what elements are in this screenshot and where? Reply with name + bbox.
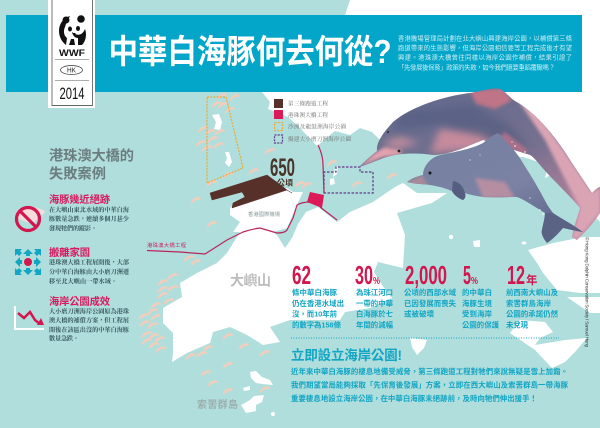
logo year: 2014 xyxy=(60,84,84,103)
heading: failure case xyxy=(49,148,134,182)
icon: dispersing arrows xyxy=(15,249,41,275)
stat: 12 years xyxy=(506,260,559,330)
line: north link xyxy=(318,145,324,193)
stat: 2000 hectares xyxy=(404,260,457,318)
logo HK badge: HK xyxy=(67,68,76,74)
intro text: 香港機場管理局計劃在北大嶼山興建海岸公園，以補償第三條 xyxy=(398,34,573,42)
body text xyxy=(291,367,569,403)
label: 650 hectares: 公頃 xyxy=(277,178,293,188)
case: moved away: 港珠澳大橋工程展開後，大部 xyxy=(49,258,129,266)
legend item: existing park: 沙洲及龍鼓洲海岸公園 xyxy=(288,122,346,130)
land: island in proposed park xyxy=(333,166,338,177)
land: north-east coast xyxy=(262,0,600,222)
brown polygon: third runway xyxy=(210,175,292,208)
land: small island xyxy=(225,152,232,167)
stat: 30 percent: 一帶的中華 xyxy=(356,299,394,308)
land: Soko islands north xyxy=(250,371,273,385)
label: Lantau: 大嶼山 xyxy=(230,272,271,288)
case: moved away: 分中華白海豚由大小磨刀洲遷 xyxy=(49,268,130,276)
stat: 2000 hectares: 或被破壞 xyxy=(404,310,435,318)
body text: 我們期望當局能夠採取「先保育後發展」方案，立即在西大嶼山及索罟群島一帶海豚 xyxy=(291,380,569,390)
stat: 62 dolphins: 的數字為158條 xyxy=(292,320,342,330)
stat: 30 percent xyxy=(355,260,394,330)
legend xyxy=(274,99,351,143)
stat: 12 years: 年 xyxy=(526,273,538,287)
stat: 5 percent: 受到海岸 xyxy=(462,310,493,318)
bridge road lines xyxy=(147,145,337,254)
label: airport: 香港國際機場 xyxy=(248,210,281,218)
case: marine park effect: 大小磨刀洲海岸公園原為港珠 xyxy=(49,308,129,316)
panel: case study of HZMB xyxy=(15,148,134,342)
speckles on dolphin skin xyxy=(469,141,544,215)
case: marine park effect: 澳大橋的補償方案，但工程展 xyxy=(49,316,129,324)
intro text: 興建。港珠澳大橋曾往同樣以海岸公園作補償，結果引證了 xyxy=(398,52,572,62)
small dolphin photo: juvenile xyxy=(405,133,583,243)
stat: 30 percent: 30 xyxy=(355,260,373,290)
stat: 5 percent: 海豚生境 xyxy=(462,299,493,308)
case: marine park effect: 開後在該區出沒的中華白海豚 xyxy=(49,326,129,334)
legend item: third runway: 第三條跑道工程 xyxy=(288,99,328,107)
land: Soko islet xyxy=(271,412,275,416)
heading: failure case: 港珠澳大橋的 xyxy=(49,148,134,164)
red polygon: bridge landfall xyxy=(307,192,324,208)
map: land masses xyxy=(163,0,600,416)
dashed outline: proposed Brothers marine park xyxy=(324,167,373,193)
case: dolphins nearly gone xyxy=(16,193,130,232)
intro text xyxy=(398,34,573,72)
land: small island east xyxy=(330,178,335,185)
stat: 30 percent: % xyxy=(373,276,380,287)
body text: 近年來中華白海豚的棲息地備受威脅，第三條跑道工程對牠們來說無疑是雪上加霜。 xyxy=(291,367,568,376)
stat: 62 dolphins: 沒，而10年前 xyxy=(292,310,338,318)
dashed outline: Sha Chau and Lung Kwu Chau marine park xyxy=(207,97,243,183)
icon: panda xyxy=(59,15,86,45)
stat: 5 percent: 5 xyxy=(463,260,471,290)
legend item: proposed park: 擬建大小磨刀洲海岸公園 xyxy=(288,135,351,143)
icon: falling chart xyxy=(15,306,44,329)
land: islands in dashed park xyxy=(212,114,222,130)
stat: 12 years: 未兌現 xyxy=(506,320,529,330)
stat: 5 percent: % xyxy=(471,276,478,287)
label: 650 hectares: 650 xyxy=(270,154,295,182)
photo credit: © Hong Kong Dolphin Conservation Society / Samuel Hung xyxy=(584,237,590,347)
stat: 12 years: 12 xyxy=(507,260,525,290)
stat: 2000 hectares: 2,000 xyxy=(405,260,447,290)
intro text: 跑道帶來的生態影響，但海岸公園相信要等工程完成後才有望 xyxy=(398,43,573,52)
land: Lamma-like island xyxy=(510,320,587,368)
heading: establish marine park: 立即設立海岸公園! xyxy=(291,347,402,363)
stat: 62 dolphins: 條中華白海豚 xyxy=(292,288,338,297)
land: Soko islet 2 xyxy=(243,386,250,391)
stat: 30 percent: 白海豚於七 xyxy=(356,310,393,318)
stat: 62 dolphins xyxy=(292,260,344,330)
land: lobe mid xyxy=(410,338,427,355)
stat: 30 percent: 為珠江河口 xyxy=(356,288,393,297)
case: marine park effect xyxy=(15,295,129,342)
line: east link xyxy=(320,207,337,220)
call to action xyxy=(291,347,569,403)
stat: 62 dolphins: 仍在香港水域出 xyxy=(292,299,344,308)
logo wordmark WWF: WWF xyxy=(59,48,86,58)
case: dolphins nearly gone: 在大嶼山東北水域的中華白海 xyxy=(49,206,129,214)
stat: 5 percent xyxy=(462,260,500,330)
heading: failure case: 失敗案例 xyxy=(49,166,106,182)
line: HZMB main road xyxy=(147,202,310,254)
marker: dolphin sightings xyxy=(138,92,398,396)
land: islet xyxy=(449,235,453,239)
stat: 12 years: 公園的承諾仍然 xyxy=(506,310,559,318)
stat: 2000 hectares: 公頃的西部水域 xyxy=(404,288,457,297)
land: islet east xyxy=(522,242,526,244)
stat: 62 dolphins: 62 xyxy=(292,260,311,290)
land: Soko islands south xyxy=(241,395,264,413)
case: marine park effect: 數量急跌。 xyxy=(49,334,79,342)
stat: 12 years: 索罟群島海岸 xyxy=(506,299,552,308)
label: 650 hectares xyxy=(270,154,295,188)
land: airport island xyxy=(230,188,303,232)
land: eastern patch xyxy=(528,237,600,293)
title banner xyxy=(6,15,582,92)
intro text: 「先發展後保育」政策的失敗，如今我們還要重蹈覆轍嗎？ xyxy=(398,62,555,72)
label: HZMB: 港珠澳大橋工程 xyxy=(147,241,187,249)
case: moved away: 搬離家園 xyxy=(49,246,90,259)
title: 中華白海豚何去何從? xyxy=(108,33,392,70)
icon: no dolphin xyxy=(16,207,45,230)
case: moved away: 移至北大嶼山一帶水域。 xyxy=(49,278,117,286)
land: eastern islet xyxy=(567,297,600,313)
case: moved away xyxy=(15,246,130,286)
land: Lantau island xyxy=(163,183,447,362)
stat: 5 percent: 的中華白 xyxy=(462,288,492,297)
stat: 5 percent: 公園的保護 xyxy=(462,320,500,330)
WWF logo tag xyxy=(48,0,95,108)
case: marine park effect: 海岸公園成效 xyxy=(49,295,111,308)
case: dolphins nearly gone: 豚數量急跌，連續多個月甚少 xyxy=(49,215,130,223)
body text: 重要棲息地設立海岸公園，在中華白海豚未絕跡前，及時向牠們伸出援手！ xyxy=(291,394,537,403)
stat: 12 years: 前西南大嶼山及 xyxy=(506,288,559,297)
stat: 30 percent: 年間的減幅 xyxy=(356,320,394,330)
case: dolphins nearly gone: 海豚幾近絕跡 xyxy=(49,193,111,206)
stat: 2000 hectares: 已因發展而喪失 xyxy=(404,299,457,308)
land: small patches xyxy=(473,240,480,247)
case: dolphins nearly gone: 發現牠們的蹤影。 xyxy=(49,224,97,232)
legend item: HZMB: 港珠澳大橋工程 xyxy=(288,111,328,119)
big dolphin photo: adult xyxy=(359,88,600,240)
label: Soko Islands: 索罟群島 xyxy=(197,398,238,411)
